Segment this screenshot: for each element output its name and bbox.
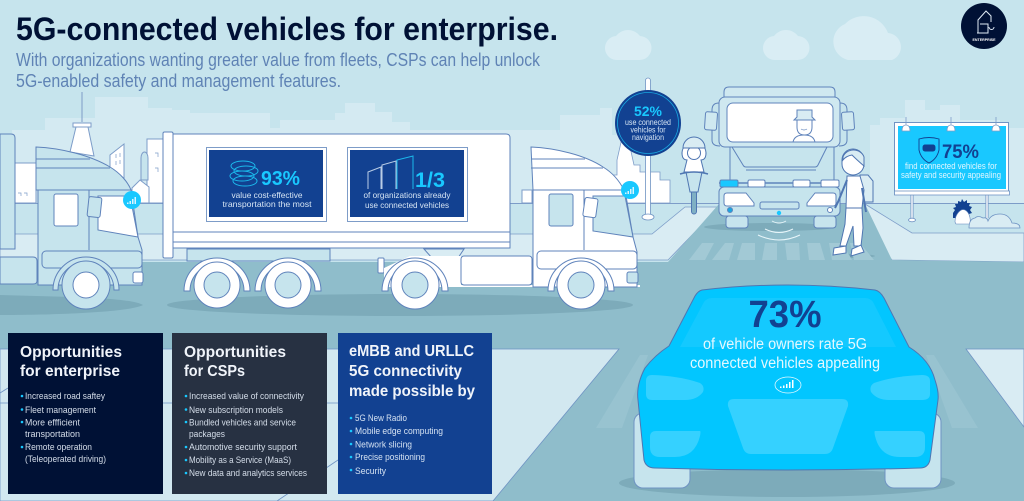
road shadows — [0, 223, 875, 316]
panel: opportunities for enterprise: Fleet management — [25, 405, 96, 416]
stat panel: one third: use connected vehicles — [365, 200, 449, 210]
bus — [704, 87, 855, 228]
panel: eMBB and URLLC: 5G connectivity — [349, 363, 462, 380]
clouds — [605, 16, 901, 60]
panel: eMBB and URLLC — [338, 333, 492, 494]
road sign: 52%: 52% — [634, 104, 662, 119]
road — [0, 204, 1024, 501]
middle trailer — [163, 132, 510, 308]
enterprise badge — [961, 3, 1007, 49]
panel: eMBB and URLLC: Network slicing — [355, 440, 412, 450]
left truck — [0, 134, 143, 309]
stat panel: one third — [348, 148, 468, 222]
panel: opportunities for enterprise: Remote operation — [25, 442, 92, 453]
car: of vehicle owners rate 5G — [703, 336, 867, 353]
panel: opportunities for CSPs: Automotive security support — [189, 442, 297, 453]
panel: opportunities for CSPs: New subscription models — [189, 405, 283, 416]
cyclist — [680, 137, 708, 214]
panel: eMBB and URLLC: Mobile edge computing — [355, 426, 443, 437]
stat panel: 93%: value cost-effective — [232, 190, 303, 200]
billboard lamps — [902, 117, 1000, 131]
lower pavements — [0, 349, 1024, 501]
zebra crossing — [689, 243, 874, 260]
stat panel: one third: 1/3 — [415, 169, 445, 192]
panel: opportunities for enterprise — [8, 333, 163, 494]
panel: eMBB and URLLC: 5G New Radio — [355, 413, 407, 424]
pedestrian — [833, 149, 873, 256]
panel: opportunities for CSPs — [172, 333, 327, 494]
bus driver — [793, 110, 815, 142]
enterprise badge: ENTERPRISE — [973, 38, 996, 42]
panel: opportunities for CSPs: Increased value of connectivity — [189, 391, 304, 402]
icon: truck signal left — [123, 191, 141, 209]
panel: eMBB and URLLC: Security — [355, 466, 386, 477]
panel: opportunities for CSPs: packages — [189, 429, 225, 440]
left truck trailer — [0, 134, 15, 249]
car: connected vehicles appealing — [690, 355, 880, 372]
signal waves — [758, 211, 800, 240]
icon: signal pill — [775, 377, 801, 393]
subtitle: With organizations wanting greater value from fleets, CSPs can help unlock — [16, 50, 541, 70]
panel: eMBB and URLLC: Precise positioning — [355, 452, 425, 463]
panel: opportunities for enterprise: for enterprise — [20, 363, 120, 380]
subtitle: 5G-enabled safety and management features. — [16, 71, 341, 91]
panel: opportunities for enterprise: (Teleoperated driving) — [25, 454, 106, 465]
icon: buildings — [368, 156, 413, 189]
stat panel: one third: of organizations already — [364, 190, 451, 200]
billboard: 75% — [894, 117, 1010, 222]
road sign: 52%: vehicles for — [630, 126, 666, 134]
billboard: 75%: safety and security appealing — [901, 170, 1001, 180]
main truck — [378, 147, 640, 309]
car: 73% — [748, 294, 822, 336]
distant outlined buildings — [15, 92, 670, 203]
stat panel: 93%: transportation the most — [222, 199, 312, 209]
panel: opportunities for CSPs: New data and analytics services — [189, 468, 307, 479]
road sign: 52%: navigation — [632, 133, 664, 142]
road sign: 52% — [615, 78, 681, 220]
panel: eMBB and URLLC: made possible by — [349, 383, 475, 400]
panel: opportunities for CSPs: Bundled vehicles and service — [189, 418, 296, 428]
panel: opportunities for enterprise: transportation — [25, 429, 80, 440]
stat panel: 93%: 93% — [261, 168, 300, 190]
billboard: 75%: find connected vehicles for — [905, 161, 997, 171]
icon: shield — [919, 138, 939, 163]
hedgehog — [953, 199, 972, 224]
city skyline silhouette — [0, 97, 1024, 203]
stat panel: 93% — [206, 148, 326, 222]
bush — [969, 214, 1020, 228]
panel: opportunities for CSPs: Mobility as a Service (MaaS) — [189, 455, 291, 466]
icon: coins — [230, 161, 258, 186]
title: 5G-connected vehicles for enterprise. — [16, 11, 558, 47]
car — [596, 285, 978, 497]
subtitle — [16, 50, 541, 91]
billboard: 75%: 75% — [942, 142, 979, 163]
road sign: 52%: use connected — [625, 118, 671, 127]
panel: eMBB and URLLC: eMBB and URLLC — [349, 343, 474, 360]
panel: opportunities for enterprise: Opportunities — [20, 344, 122, 361]
panel: opportunities for enterprise: Increased road saftey — [25, 391, 105, 402]
ground band and pavements — [0, 203, 1024, 263]
panel: opportunities for enterprise: More effficient — [25, 418, 80, 428]
panel: opportunities for CSPs: Opportunities — [184, 344, 286, 361]
panel: opportunities for CSPs: for CSPs — [184, 363, 245, 380]
icon: truck signal right — [621, 181, 639, 199]
